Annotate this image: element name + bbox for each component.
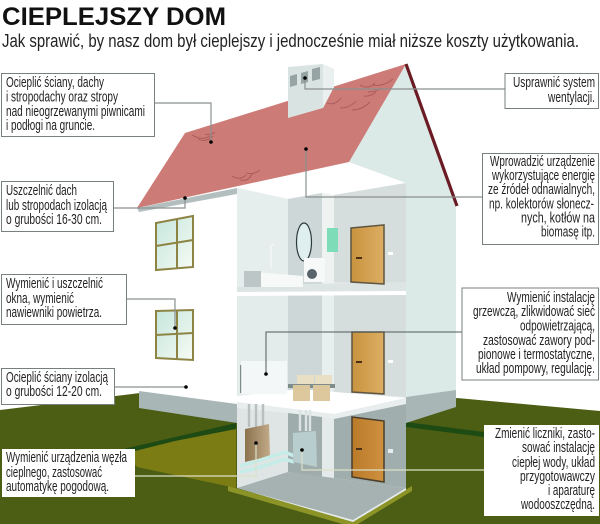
window lower	[156, 310, 193, 360]
meter cabinet	[293, 410, 317, 467]
callout: insulate walls and roofs: i stropodachy oraz stropy	[6, 90, 119, 106]
top floor back wall	[288, 193, 322, 285]
interior cutaway	[237, 162, 406, 522]
ground	[0, 393, 600, 524]
callout: heating system	[462, 288, 598, 380]
table and chairs	[288, 375, 335, 401]
slab upper edge	[237, 291, 406, 296]
callout: wall insulation: o grubości 12-20 cm.	[6, 384, 102, 400]
bathroom fittings	[244, 223, 338, 287]
callout: ventilation	[505, 74, 598, 108]
callout: insulate walls and roofs	[2, 74, 154, 136]
callout: wall insulation	[2, 368, 114, 404]
callout: renewable energy	[482, 154, 598, 244]
leader lines	[113, 76, 505, 476]
top floor pillar	[322, 193, 334, 285]
door basement	[352, 417, 393, 482]
callout: meters and hot water	[484, 425, 599, 516]
middle floor back wall	[288, 295, 322, 390]
basement pillar	[322, 417, 334, 478]
middle floor	[237, 389, 406, 414]
heat pipes	[240, 452, 294, 472]
boiler	[245, 404, 270, 462]
callout: seal roof: Uszczelnić dach	[6, 183, 77, 199]
callout: heat node	[2, 449, 135, 497]
callout: windows: okna, wymienić	[6, 291, 74, 307]
door top	[351, 225, 393, 284]
callout: seal roof: o grubości 16-30 cm.	[6, 212, 102, 228]
callout: heat node: Wymienić urządzenia węzła	[6, 450, 128, 466]
basement left wall	[237, 408, 288, 488]
house gable wall	[349, 64, 456, 405]
roof	[137, 64, 406, 212]
callout: heat node: automatykę pogodową.	[6, 479, 109, 495]
callout: insulate walls and roofs: i podłogi na gruncie.	[6, 118, 95, 134]
roof edge	[406, 64, 457, 206]
callout: seal roof: lub stropodach izolacją	[6, 198, 108, 214]
callout: heat node: cieplnego, zastosować	[6, 465, 102, 481]
callout: insulate walls and roofs: Ocieplić ściany, dachy	[6, 75, 105, 91]
door middle	[352, 332, 393, 394]
basement right wall	[334, 404, 406, 488]
callout: wall insulation: Ocieplić ściany izolacją	[6, 370, 109, 386]
slab lower edge	[237, 398, 406, 419]
top floor left wall	[237, 188, 288, 287]
callout: insulate walls and roofs: nad nieogrzewanymi piwnicami	[6, 104, 145, 120]
radiator	[240, 361, 287, 394]
attic ceiling	[237, 162, 406, 199]
middle floor left wall	[237, 295, 288, 396]
title: CIEPLEJSZY DOM	[2, 3, 226, 31]
chimney	[288, 64, 334, 118]
slab upper	[237, 282, 406, 292]
middle floor right wall	[334, 294, 406, 397]
middle floor pillar	[322, 292, 334, 389]
callout: windows: nawiewniki powietrza.	[6, 305, 102, 321]
basement back wall	[288, 413, 322, 477]
top floor right wall	[334, 183, 406, 285]
window upper	[156, 216, 193, 270]
callout: seal roof	[2, 182, 114, 232]
plinth	[139, 390, 456, 423]
callout: windows	[2, 274, 126, 324]
basement floor	[237, 472, 406, 520]
callout: windows: Wymienić i uszczelnić	[6, 276, 103, 292]
